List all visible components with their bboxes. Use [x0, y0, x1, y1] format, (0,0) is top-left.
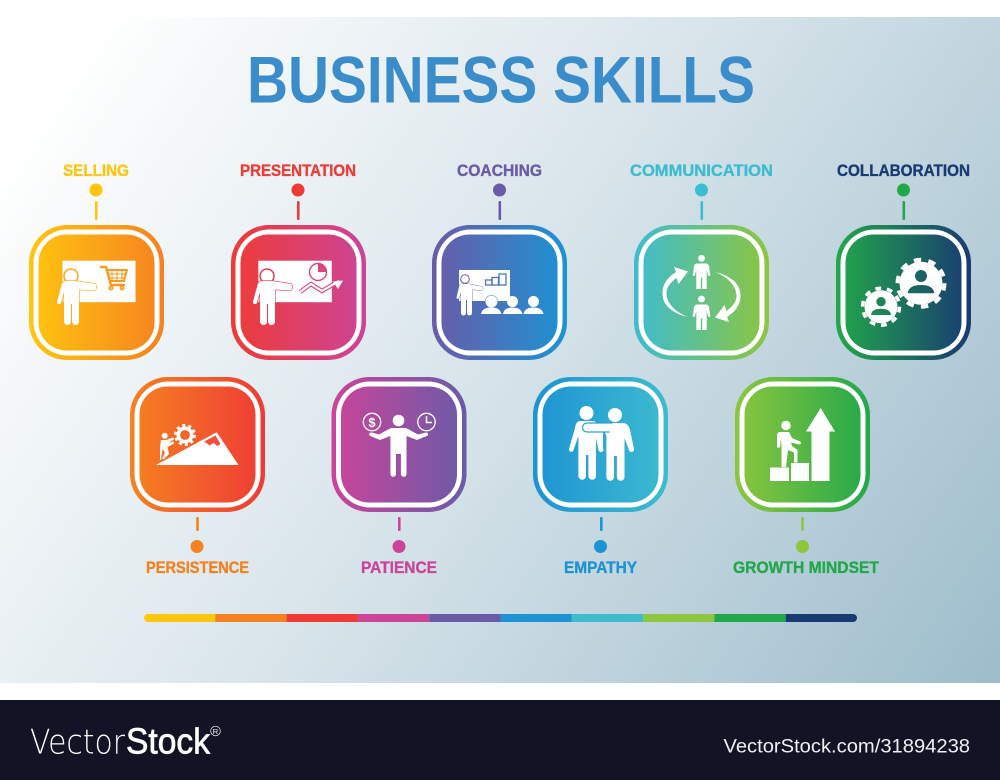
colour legend bar [144, 614, 857, 622]
skill: empathy: EMPATHY [564, 559, 637, 577]
footer image id: VectorStock.com/31894238 [724, 736, 970, 758]
icon: person pushing gear up a mountain [156, 426, 238, 465]
skill: communication: COMMUNICATION [630, 162, 773, 180]
skill: selling: SELLING [63, 162, 129, 180]
title: BUSINESS SKILLS [247, 43, 755, 117]
icon: person climbing steps with up arrow [770, 408, 835, 481]
skill: growth mindset: GROWTH MINDSET [733, 559, 879, 577]
skill: patience: PATIENCE [361, 559, 437, 577]
skill: communication [630, 162, 773, 360]
skill: empathy [533, 377, 668, 577]
footer logo: Stock [126, 720, 211, 761]
skill: coaching: COACHING [457, 162, 542, 180]
icon: person comforting another [569, 406, 634, 481]
icon: two gears with people [862, 260, 944, 325]
skill: growth mindset [733, 377, 879, 577]
skill: coaching [432, 162, 567, 360]
skill: presentation [231, 162, 366, 360]
icon: presenter with pie and growth arrow [253, 261, 343, 325]
skill: patience [332, 377, 466, 577]
skill: selling [29, 162, 164, 360]
skill: collaboration: COLLABORATION [837, 162, 970, 180]
icon: presenter with shopping cart [57, 261, 136, 325]
icon: two people exchanging arrows [662, 255, 741, 330]
icon: person balancing money and time [363, 413, 435, 477]
skill: persistence [130, 377, 265, 577]
footer band [0, 700, 1000, 780]
skill: presentation: PRESENTATION [240, 162, 356, 180]
icon: coach with class and board [456, 270, 544, 316]
skill: persistence: PERSISTENCE [146, 559, 249, 577]
footer logo [30, 720, 220, 762]
footer logo: R [213, 727, 219, 736]
icon: person balancing money and time: $ [368, 415, 376, 430]
footer logo: Vector [30, 722, 125, 762]
skill: collaboration [836, 162, 971, 360]
